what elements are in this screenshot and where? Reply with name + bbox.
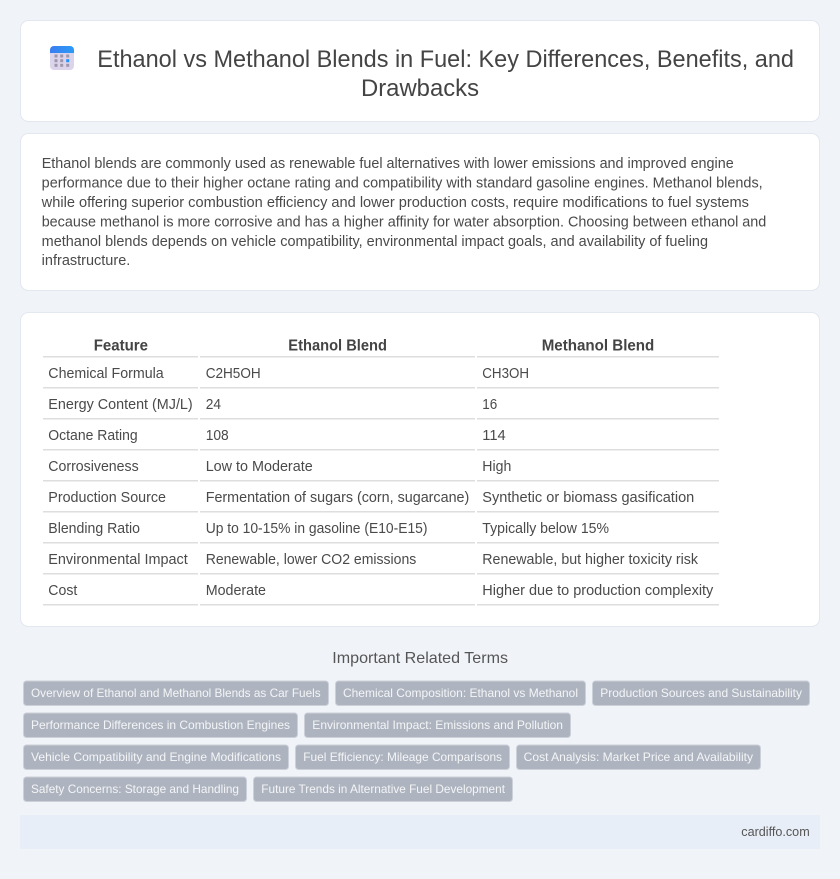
tag: Cost Analysis: Market Price and Availability [524, 750, 753, 764]
tag [24, 681, 328, 706]
row: corrosiveness: Corrosiveness [48, 459, 139, 475]
footer [20, 815, 820, 849]
text block: introduction paragraph [41, 156, 766, 269]
row: production source: Synthetic or biomass gasification [482, 490, 694, 506]
tag [24, 713, 298, 738]
tag [24, 745, 288, 770]
tag: Future Trends in Alternative Fuel Development [261, 782, 506, 796]
text block: introduction paragraph: because methanol is more corrosive and has a higher affinity for water absorption. Choosing between ethanol and [42, 214, 766, 230]
row: energy content [48, 397, 497, 413]
tag: Performance Differences in Combustion Engines [31, 718, 290, 732]
row: chemical formula: CH3OH [482, 366, 529, 382]
tag [516, 745, 760, 770]
row: chemical formula: C2H5OH [206, 366, 261, 382]
row: environmental impact: Renewable, but higher toxicity risk [482, 552, 699, 568]
text block: introduction paragraph: methanol blends depends on vehicle compatibility, environmental impact goals, and availability of fueling [42, 234, 708, 250]
row: environmental impact: Environmental Impact [48, 552, 188, 568]
panel: title card [20, 20, 820, 122]
row: blending ratio [48, 521, 609, 537]
tag [296, 745, 510, 770]
row: cost: Cost [48, 583, 77, 599]
row: cost: Moderate [206, 583, 266, 599]
table header: Ethanol Blend [288, 338, 387, 354]
row: octane rating: Octane Rating [48, 428, 138, 444]
title: Drawbacks [361, 75, 479, 102]
row: energy content: Energy Content (MJ/L) [48, 397, 193, 413]
tag: Environmental Impact: Emissions and Pollution [312, 718, 563, 732]
tag: Production Sources and Sustainability [600, 686, 802, 700]
row: corrosiveness: Low to Moderate [206, 459, 313, 475]
text block: introduction paragraph: Ethanol blends are commonly used as renewable fuel alternatives with lower emissions and improved engine [42, 156, 734, 172]
tag: Chemical Composition: Ethanol vs Methanol [343, 686, 578, 700]
title [97, 46, 794, 102]
row: octane rating [48, 428, 506, 444]
footer: cardiffo.com [741, 824, 810, 839]
row: environmental impact [48, 552, 699, 568]
panel: related term tags [24, 681, 810, 802]
icon: calendar [50, 46, 74, 70]
row: cost: Higher due to production complexity [482, 583, 714, 599]
tag [336, 681, 586, 706]
tag: Fuel Efficiency: Mileage Comparisons [303, 750, 502, 764]
heading: important related terms: Important Related Terms [332, 650, 508, 667]
row: octane rating: 108 [206, 428, 229, 444]
row: chemical formula: Chemical Formula [48, 366, 164, 382]
tag [254, 777, 512, 802]
row: chemical formula [48, 366, 529, 382]
row: octane rating: 114 [482, 428, 506, 444]
row: blending ratio: Typically below 15% [482, 521, 609, 537]
tag: Overview of Ethanol and Methanol Blends as Car Fuels [31, 686, 321, 700]
row: environmental impact: Renewable, lower CO2 emissions [206, 552, 416, 568]
tag [592, 681, 810, 706]
row: corrosiveness: High [482, 459, 511, 475]
text block: introduction paragraph: infrastructure. [42, 253, 130, 269]
row: energy content: 16 [482, 397, 497, 413]
row: energy content: 24 [206, 397, 221, 413]
row: production source: Production Source [48, 490, 166, 506]
tag [304, 713, 570, 738]
row: blending ratio: Blending Ratio [48, 521, 140, 537]
panel: introduction [20, 134, 820, 290]
text block: introduction paragraph: performance due to their higher octane rating and compatibility with standard gasoline engines. Methanol blends, [42, 176, 763, 192]
tag: Safety Concerns: Storage and Handling [31, 782, 239, 796]
row: production source: Fermentation of sugars (corn, sugarcane) [206, 490, 469, 506]
row: blending ratio: Up to 10-15% in gasoline (E10-E15) [206, 521, 428, 537]
row: cost [48, 583, 714, 599]
row: production source [48, 490, 694, 506]
text block: introduction paragraph: while offering superior combustion efficiency and lower production costs, require modifications to fuel systems [41, 195, 749, 211]
row: corrosiveness [48, 459, 511, 475]
panel: comparison table [20, 312, 820, 626]
tag [24, 777, 246, 802]
title: Ethanol vs Methanol Blends in Fuel: Key Differences, Benefits, and [97, 46, 794, 73]
table header: Methanol Blend [542, 338, 654, 354]
tag: Vehicle Compatibility and Engine Modifications [31, 750, 281, 764]
table header [94, 338, 654, 354]
table header: Feature [94, 338, 148, 354]
